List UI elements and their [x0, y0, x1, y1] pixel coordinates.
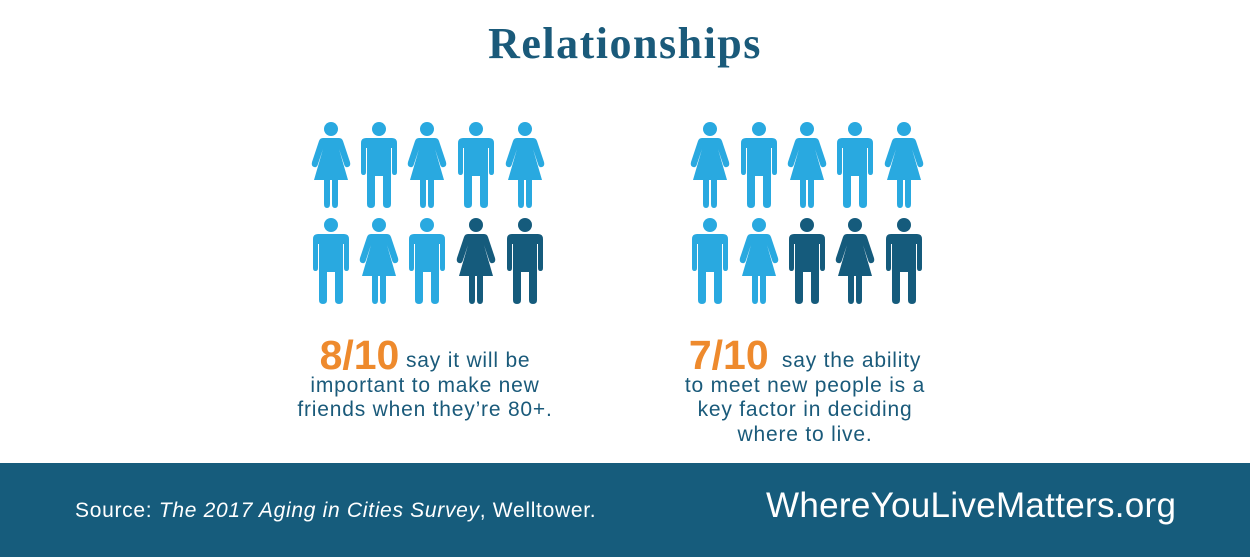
stat text: right: 7/10 say the ability — [689, 332, 921, 378]
footer — [0, 463, 1250, 557]
stat text: left: important to make new — [310, 374, 540, 396]
stat text: left — [297, 332, 553, 421]
stat text: left: 8/10 say it will be — [320, 332, 530, 378]
stat text: right: key factor in deciding — [698, 398, 912, 421]
icon group: right 7/10 — [690, 122, 924, 304]
stat text: left: friends when they’re 80+. — [297, 398, 553, 421]
stat text: right — [685, 332, 925, 446]
icon group: left 8/10 — [312, 122, 544, 304]
website url: WhereYouLiveMatters.org — [766, 486, 1176, 525]
source text: Source: The 2017 Aging in Cities Survey, Welltower. — [75, 499, 596, 522]
title: Relationships — [488, 19, 762, 68]
stat text: right: where to live. — [738, 422, 872, 446]
stat text: right: to meet new people is a — [685, 374, 925, 396]
